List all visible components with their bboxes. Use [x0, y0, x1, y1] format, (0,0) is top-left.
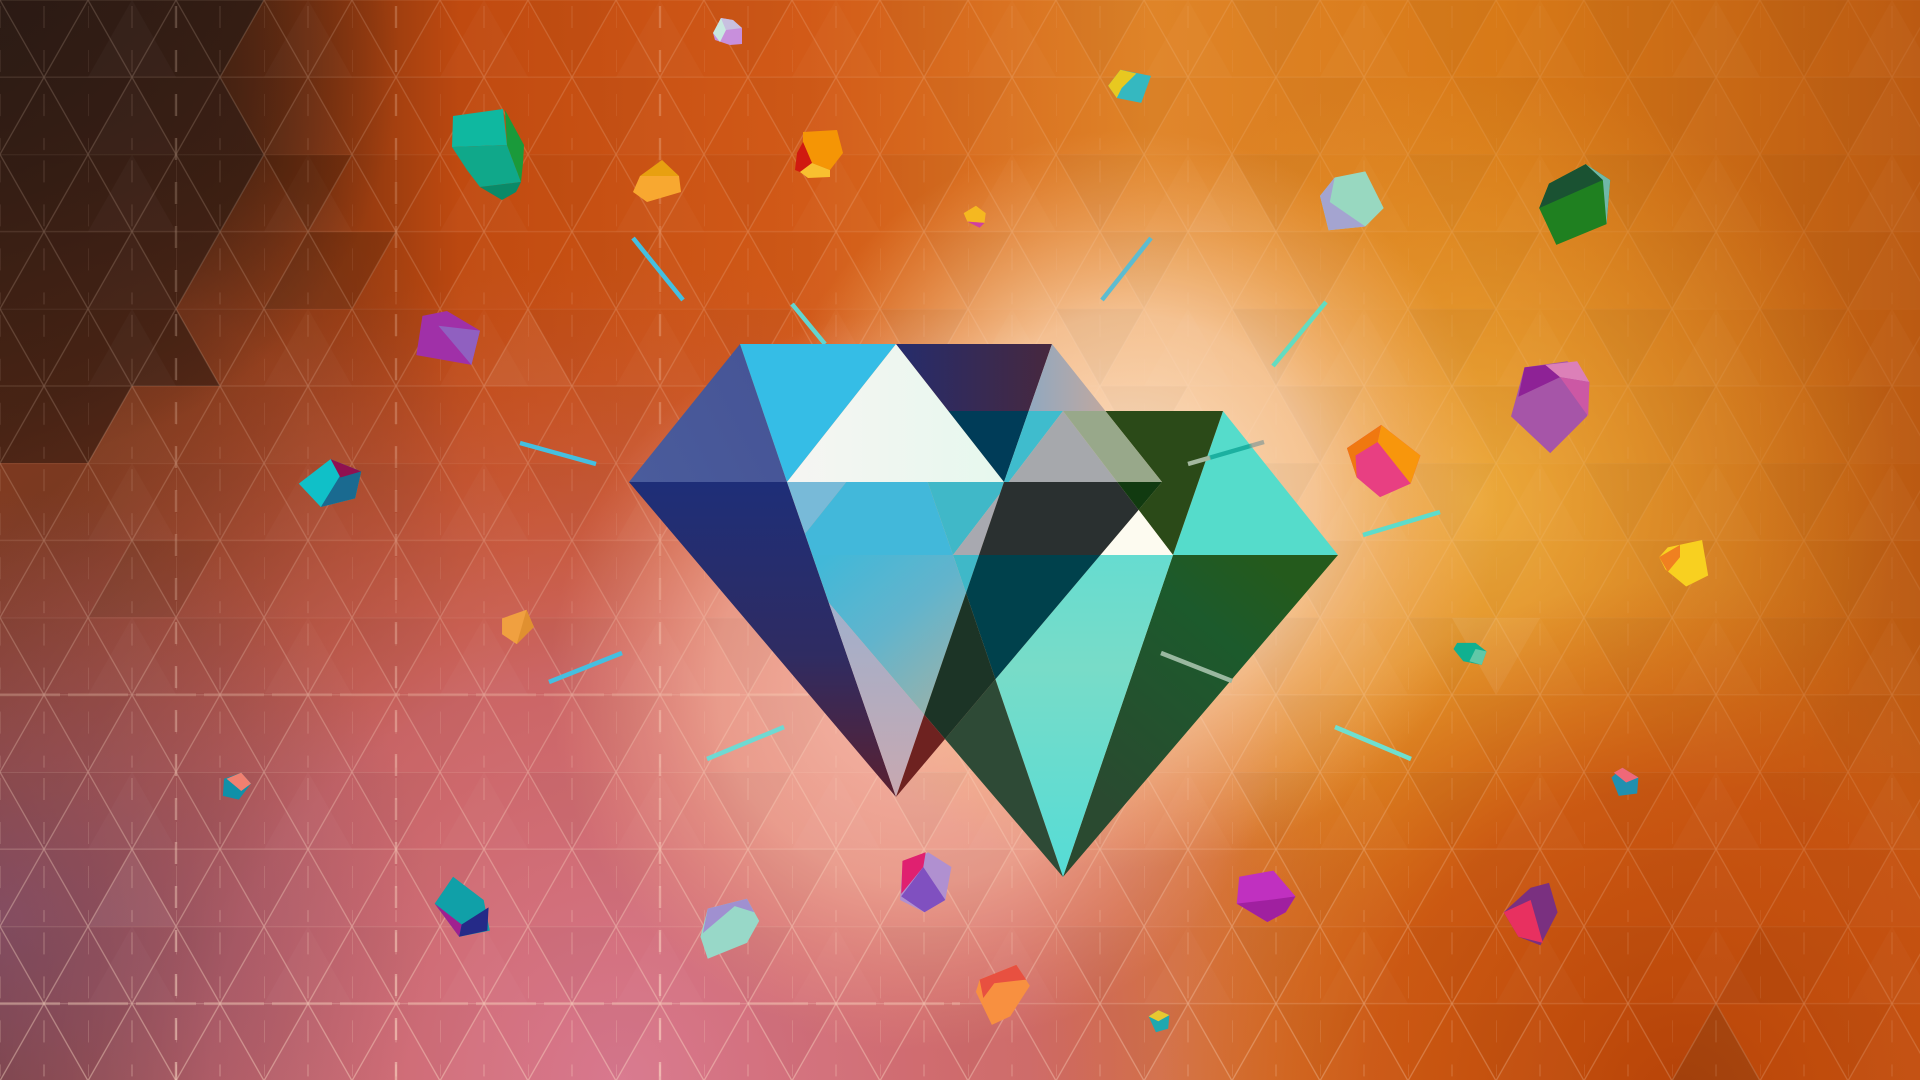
overlap: dark blue: [948, 411, 1029, 482]
overlap: small teal: [953, 555, 979, 593]
overlap: charcoal: [979, 482, 1139, 555]
left diamond: pink-grey point: [829, 603, 924, 797]
gem: yellow: [1659, 540, 1708, 587]
gem: large green: [452, 109, 524, 200]
right diamond: lower left facet: [945, 679, 1063, 877]
overlap: cyan lower: [812, 555, 966, 715]
overlap: very dark green: [1117, 482, 1162, 510]
left diamond: white table facet: [787, 344, 1004, 482]
gem: purple violet: [416, 311, 480, 365]
right diamond: upper right facet: [1173, 411, 1338, 555]
gem: amber: [633, 160, 681, 202]
overlap: olive facet: [1063, 411, 1162, 482]
diamond: overlapping pair: [629, 344, 1338, 877]
left diamond: dark red point: [896, 715, 945, 797]
gem: pale lilac: [713, 18, 742, 45]
left diamond: grey top right facet: [1029, 344, 1105, 411]
overlap: dark teal: [966, 555, 1100, 679]
gem: orange pink: [976, 965, 1030, 1025]
overlap: teal triangle: [928, 482, 1004, 555]
left diamond: navy top facet: [896, 344, 1052, 411]
gem: tiny yellow teal: [1149, 1010, 1169, 1032]
overlap: dark green: [924, 593, 995, 739]
gem: crimson purple: [1504, 883, 1558, 945]
left diamond: cyan light corner: [787, 482, 846, 534]
gem: pale teal lower: [700, 899, 759, 959]
gem: small pink teal: [1611, 768, 1638, 796]
right diamond: white facet: [1100, 510, 1173, 555]
right diamond: lower right facet: [1063, 555, 1338, 877]
right diamond: centre teal facet: [995, 555, 1173, 877]
gem: teal purple: [435, 877, 490, 937]
gem: dark green: [1539, 164, 1610, 245]
gem: pink orange: [1347, 425, 1420, 497]
dark faceted corner: [0, 0, 264, 463]
gem: small yellow: [964, 206, 986, 228]
gem: pale teal: [1320, 171, 1384, 230]
overlap: grey sliver: [953, 494, 1000, 555]
gem: pink lavender: [900, 852, 951, 912]
left diamond: cyan top facet: [740, 344, 896, 482]
gem: teal navy: [299, 459, 361, 507]
gem: tiny teal salmon: [223, 773, 251, 800]
overlap: cyan upper: [805, 482, 953, 555]
gem: magenta: [1237, 871, 1296, 922]
gem: yellow teal: [1108, 70, 1151, 103]
gem: small teal: [1453, 643, 1487, 665]
overlap: grey facet: [1009, 411, 1117, 482]
gem: purple: [1511, 361, 1589, 453]
gem: orange red: [795, 130, 843, 178]
overlap: teal band: [1004, 411, 1063, 482]
right diamond: dark top facet: [1105, 411, 1223, 555]
gem: small orange: [502, 610, 534, 644]
gems: upper right and scattered gems: [223, 70, 1708, 1032]
left diamond: upper left facet: [629, 344, 787, 482]
scattered darker and lighter triangles: [88, 155, 1804, 1080]
ray lines behind diamond: [520, 238, 1440, 759]
left diamond: lower left navy facet: [629, 482, 896, 797]
ray lines over diamond: [1161, 442, 1264, 681]
